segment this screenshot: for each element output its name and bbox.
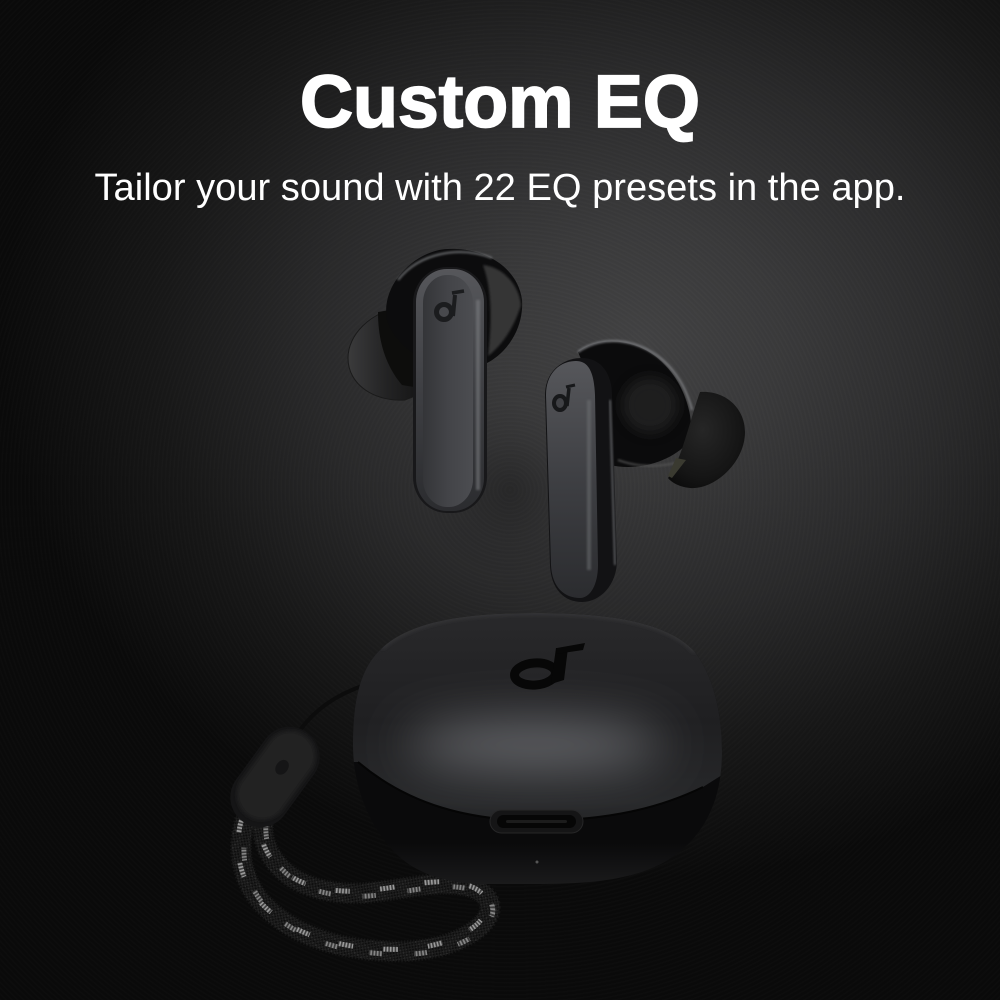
right earbud: [545, 341, 745, 602]
USB port: [490, 810, 583, 833]
subtitle: Tailor your sound with 22 EQ presets in the app.: [94, 167, 906, 209]
lid seam: [358, 762, 703, 821]
earbud body: [578, 341, 691, 467]
strap fob: [218, 715, 332, 839]
left earbud: [348, 249, 522, 513]
LED: [536, 860, 538, 864]
charging case: [353, 613, 722, 884]
title: Custom EQ: [300, 60, 700, 143]
earbud body: [386, 249, 522, 372]
case logo: [514, 643, 585, 686]
fob logo: [272, 757, 292, 777]
earbud stem: [413, 267, 487, 513]
earbud stem: [545, 358, 617, 602]
ear tip: [668, 392, 745, 488]
logo: [554, 385, 575, 410]
case lid: [353, 613, 722, 818]
ear tip: [348, 308, 425, 400]
braided strap: [238, 818, 493, 954]
case base: [353, 613, 722, 884]
logo: [436, 291, 464, 320]
lanyard cord: [300, 685, 365, 730]
